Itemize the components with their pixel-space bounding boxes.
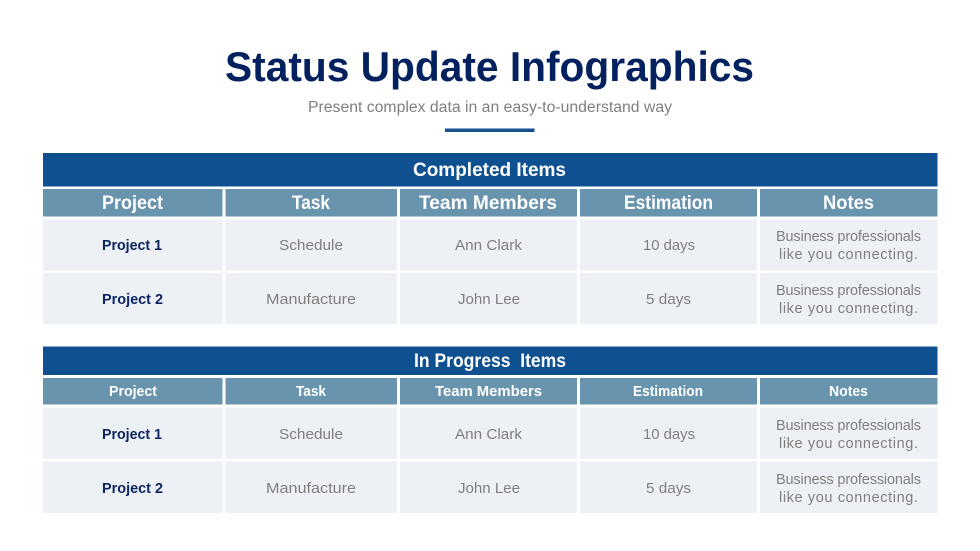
row: project 2: 5 days bbox=[646, 291, 691, 308]
row: project 1: Schedule bbox=[279, 426, 343, 443]
subtitle: Present complex data in an easy-to-understand way bbox=[308, 99, 672, 116]
row: project 2: Manufacture bbox=[266, 480, 356, 497]
header row: Project bbox=[109, 384, 157, 400]
banner: completed items bbox=[43, 153, 938, 186]
panel: completed items table bbox=[43, 153, 938, 324]
header row: Project bbox=[102, 193, 164, 214]
header row bbox=[43, 378, 938, 404]
row: project 1: Ann Clark bbox=[455, 426, 523, 443]
panel: in progress items table bbox=[43, 346, 938, 513]
banner: completed items: Completed Items bbox=[413, 160, 566, 181]
header row: Task bbox=[292, 193, 330, 214]
row: project 2 bbox=[43, 273, 938, 324]
header row: Team Members bbox=[435, 384, 542, 400]
title: Status Update Infographics bbox=[225, 43, 754, 90]
row: project 2: John Lee bbox=[458, 480, 520, 497]
header row: Notes bbox=[829, 384, 868, 400]
row: project 1: Project 1 bbox=[102, 238, 162, 254]
row: project 1: Project 1 bbox=[102, 427, 162, 443]
banner: in progress items: In Progress Items bbox=[414, 351, 566, 372]
header row: Team Members bbox=[419, 193, 557, 214]
row: project 2: Business professionals bbox=[776, 472, 921, 488]
row: project 1: 10 days bbox=[643, 426, 695, 443]
header row: Estimation bbox=[624, 193, 713, 214]
row: project 1: 10 days bbox=[643, 237, 695, 254]
row: project 1: like you connecting. bbox=[779, 247, 918, 263]
accent bar bbox=[445, 128, 534, 132]
banner: in progress items bbox=[43, 346, 938, 375]
row: project 1: Ann Clark bbox=[455, 237, 523, 254]
row: project 2: Project 2 bbox=[102, 292, 163, 308]
header row: Task bbox=[296, 384, 327, 400]
row: project 1: Business professionals bbox=[776, 229, 921, 245]
row: project 2: like you connecting. bbox=[779, 301, 918, 317]
header row: Estimation bbox=[633, 384, 703, 400]
row: project 2: 5 days bbox=[646, 480, 691, 497]
row: project 2 bbox=[43, 462, 938, 513]
row: project 1: like you connecting. bbox=[779, 436, 918, 452]
row: project 2: like you connecting. bbox=[779, 490, 918, 506]
header row: Notes bbox=[823, 193, 874, 214]
row: project 2: Manufacture bbox=[266, 291, 356, 308]
header row bbox=[43, 189, 938, 216]
row: project 2: Project 2 bbox=[102, 481, 163, 497]
row: project 2: Business professionals bbox=[776, 283, 921, 299]
row: project 1 bbox=[43, 408, 938, 459]
row: project 1: Business professionals bbox=[776, 418, 921, 434]
row: project 1: Schedule bbox=[279, 237, 343, 254]
row: project 2: John Lee bbox=[458, 291, 520, 308]
row: project 1 bbox=[43, 220, 938, 270]
